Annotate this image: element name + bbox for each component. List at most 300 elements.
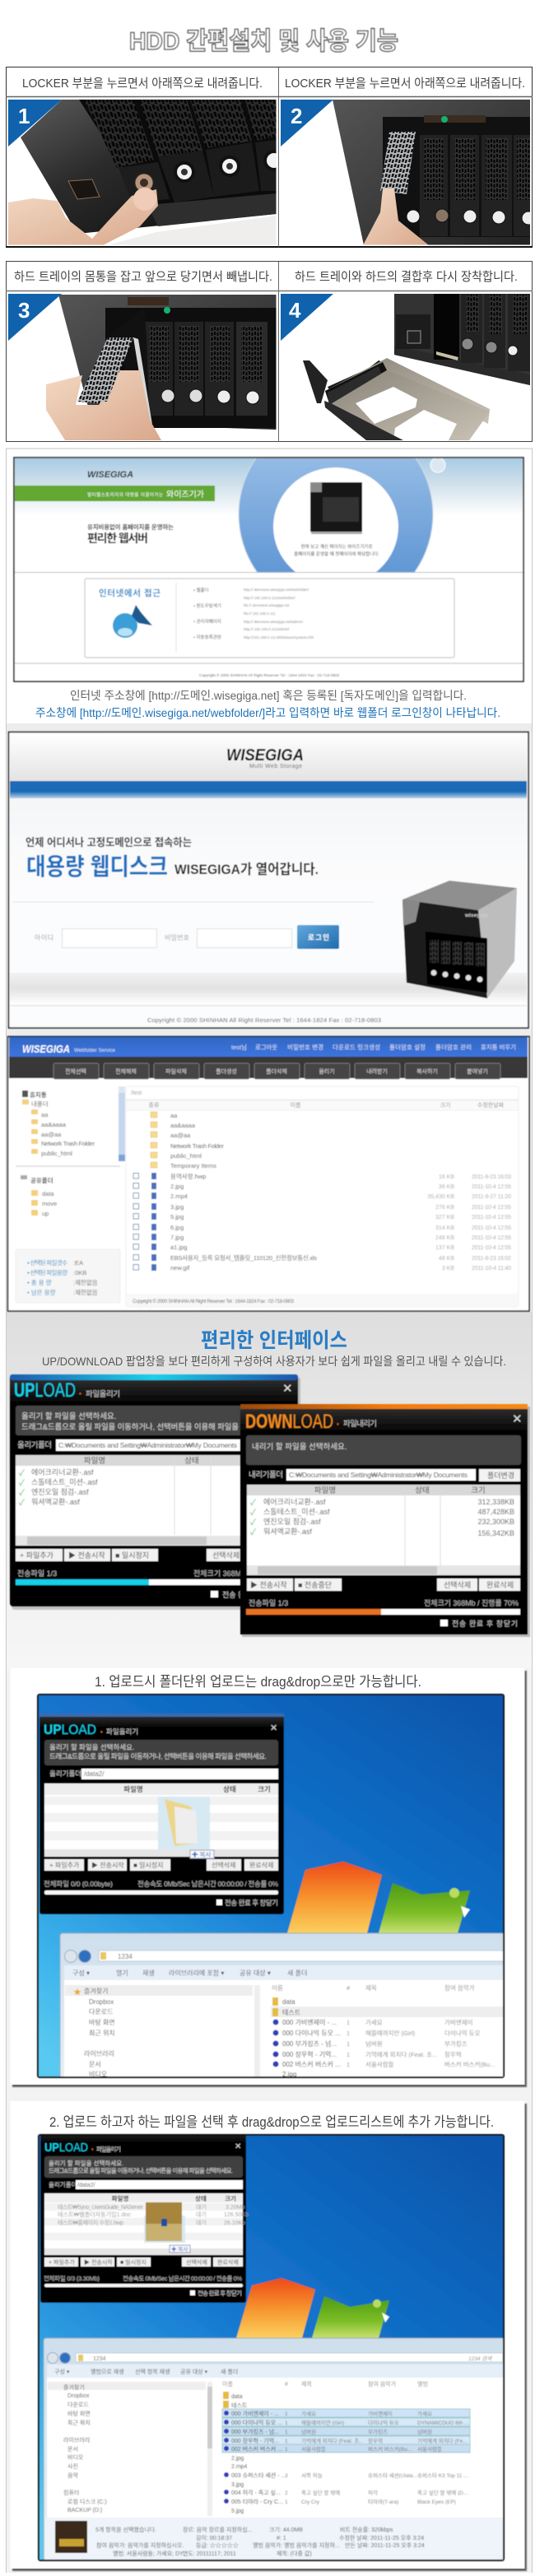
upload window: 올리기폴더	[49, 1769, 81, 1778]
explorer window: BACKUP (D:)	[67, 2508, 102, 2513]
explorer window: 장우혁	[368, 2437, 383, 2444]
explorer window: 앨범	[417, 2380, 428, 2388]
explorer window: 라이브러리에 포함 ▾	[169, 1969, 224, 1977]
download folder field: 폴더변경	[487, 1471, 514, 1480]
download file table: 487,428KB	[477, 1508, 514, 1516]
subheading: UP/DOWNLOAD 팝업창을 보다 편리하게 구성하여 사용자가 보다 쉽게 파일을 올리고 내릴 수 있습니다.	[42, 1355, 506, 1368]
device caption: 홈페이지를 운영할 때 첫페이지에 해당합니다.	[294, 551, 379, 557]
upload window: 대기	[196, 2219, 207, 2226]
access panel: • 웹폴더	[193, 587, 209, 593]
explorer window: 문서	[67, 2445, 78, 2453]
access panel: file:// demotest.wisegiga.net	[244, 603, 290, 607]
upload window: 완료삭제	[249, 1861, 273, 1869]
download title: ✕	[512, 1412, 523, 1426]
explorer window: 새 폴더	[287, 1969, 307, 1977]
explorer window: 이름	[272, 1983, 283, 1992]
upload window: 전체파일 0/3 (3.30Mb)	[44, 2274, 100, 2282]
upload window: 전송 완료 후 창닫기	[225, 1899, 278, 1907]
device: WISEGIGA NAS: wisegiga	[464, 913, 488, 918]
folder tree: 내폴더	[31, 1100, 49, 1108]
folder tree	[16, 1086, 125, 1217]
explorer window: 서울사람들	[301, 2445, 326, 2453]
explorer window: 000 다이나믹 듀오 ...	[231, 2419, 282, 2426]
green banner text	[87, 490, 204, 500]
upload file table: ✓	[19, 1479, 25, 1488]
upload folder field	[17, 1439, 242, 1451]
folder tree: move	[42, 1200, 57, 1207]
explorer window: 허각	[368, 2489, 378, 2496]
explorer window: 비디오	[89, 2071, 107, 2078]
folder tree: aa	[41, 1111, 49, 1118]
toolbar tabs: 폴더삭제	[266, 1067, 287, 1075]
upload file table: 워셔액교환-.asf	[31, 1497, 80, 1506]
download file table: 엔진오일 점검-.asf	[263, 1517, 321, 1526]
explorer window: 제목	[365, 1984, 377, 1992]
toolbar tabs: 폴더생성	[216, 1067, 237, 1075]
address instruction text: 인터넷 주소창에 [http://도메인.wisegiga.net] 혹은 등록된 [독자도메인]을 입력합니다.	[70, 689, 467, 702]
explorer window: ★	[73, 1988, 81, 1997]
upload title: UPLOAD	[14, 1379, 76, 1402]
logo: WISEGIGA	[87, 470, 133, 480]
explorer window: 2.jpg	[282, 2071, 296, 2078]
upload window: + 파일추가	[49, 2258, 75, 2266]
explorer window: data	[231, 2394, 243, 2400]
download file table: 워셔액교환-.asf	[263, 1527, 312, 1536]
details pane: 만든 날짜: 2011-11-25 오후 3:24	[345, 2541, 425, 2549]
details pane: 제목: (다중 값)	[277, 2550, 312, 2557]
upload window: 선택삭제	[212, 1861, 235, 1869]
upload buttons	[16, 1549, 242, 1561]
folder tree: data	[42, 1190, 54, 1197]
upload window: UPLOAD	[44, 2141, 88, 2155]
download file table: ✓	[250, 1518, 256, 1527]
folder tree: aa@aa	[41, 1131, 62, 1138]
upload buttons: + 파일추가	[20, 1551, 54, 1560]
file list table: 3.jpg	[170, 1203, 184, 1211]
upload window: ■ 일시정지	[120, 2258, 147, 2266]
green banner text: 와이즈기가	[166, 490, 204, 500]
intro line: 언제 어디서나 고정도메인으로 접속하는	[26, 836, 192, 849]
download message	[246, 1435, 521, 1465]
explorer window: 참여 음악가	[444, 1983, 475, 1992]
explorer window: #	[347, 1984, 351, 1992]
upload window: 올리기 할 파일을 선택하세요.	[49, 1743, 134, 1751]
download buttons	[247, 1579, 520, 1591]
details pane: 비트 전송률: 320kbps	[340, 2526, 393, 2533]
upload file table: ✓	[19, 1469, 25, 1478]
file list table: 2.jpg	[170, 1183, 184, 1190]
explorer window: 슈퍼스타 K3 Top 11 ...	[417, 2471, 468, 2479]
explorer window: 002 버스커 버스커 ...	[282, 2060, 341, 2068]
file list table: 16 KB	[439, 1174, 454, 1180]
upload title	[14, 1379, 293, 1402]
access panel: http:// 192.168.0.111/webfolder/	[244, 596, 295, 600]
explorer window: 000 가비엔제이 - ...	[282, 2018, 337, 2026]
explorer window: 1	[347, 2019, 350, 2026]
panel: install steps 1 and 2	[6, 67, 535, 247]
explorer window: 선택 항목 재생	[135, 2368, 170, 2375]
folder tree: up	[42, 1210, 49, 1217]
headline: WISEGIGA가 열어갑니다.	[174, 862, 319, 877]
explorer window: 가비엔제이	[368, 2410, 393, 2417]
access panel: file:// 192.168.0.111	[244, 611, 276, 616]
upload window: /data2/	[84, 1770, 105, 1778]
access panel: http:// demotest.wisegiga.net/admin/	[244, 620, 304, 624]
storage info box: :제한없음	[73, 1289, 98, 1296]
file list table: aa	[170, 1112, 178, 1119]
upload window: ■ 일시정지	[133, 1861, 163, 1869]
download title: 파일내리기	[343, 1420, 377, 1429]
upload window: 테스트₩홈페이지 수정1.hwp	[58, 2219, 123, 2226]
step number 4: 4	[289, 298, 301, 323]
download folder field: C:₩Documents and Setting₩Administrator₩My Documents	[289, 1471, 468, 1479]
file list table: 137 KB	[435, 1245, 454, 1251]
explorer window: 가세요	[365, 2019, 383, 2026]
explorer window: 서울사람들	[365, 2061, 394, 2068]
explorer window: 넘버원	[365, 2039, 383, 2048]
file list table: public_html	[170, 1152, 202, 1160]
folder tree: Network Trash Folder	[41, 1140, 95, 1147]
upload window: ▶ 전송시작	[84, 2258, 113, 2266]
top header bar: test님	[231, 1044, 247, 1051]
logo: WISEGIGA	[226, 746, 304, 765]
explorer window: 최근 위치	[89, 2029, 115, 2037]
download progress: 전체크기 368Mb / 진행률 70%	[424, 1598, 519, 1607]
explorer window: 기억에게 외치다 (Feat. 조...	[301, 2437, 364, 2444]
upload window: 드래그&드롭으로 올릴 파일을 이동하거나, 선택버튼을 이용해 파일을 선택하세요.	[49, 2166, 233, 2174]
top header bar: WISEGIGA	[22, 1043, 70, 1055]
photo: step 4 tray and device	[281, 293, 530, 440]
headline	[87, 523, 174, 545]
download buttons: ■ 전송중단	[298, 1581, 332, 1589]
file list table: new.gif	[170, 1264, 190, 1272]
explorer window: 즐겨찾기	[84, 1987, 108, 1995]
access panel: • 자동동록관량	[193, 634, 221, 640]
file list table: 6.jpg	[170, 1224, 184, 1231]
toolbar tabs: 파일삭제	[165, 1067, 187, 1075]
download progress: 전송파일 1/3	[249, 1599, 288, 1607]
file list table: 248 KB	[435, 1235, 454, 1241]
device: WISEGIGA NAS	[402, 881, 517, 998]
access panel	[85, 579, 454, 658]
upload title: 파일올리기	[86, 1390, 120, 1399]
explorer window: 장우혁	[444, 2050, 462, 2058]
upload progress	[16, 1569, 252, 1599]
explorer window: 1	[347, 2061, 350, 2068]
access panel: • 관리자페이지	[193, 618, 221, 625]
details pane: 참여 음악가: 음악가를 지정하십시오.	[96, 2541, 184, 2549]
download title	[245, 1411, 523, 1433]
upload window: 전송 완료 후 창닫기	[198, 2289, 242, 2297]
explorer window: 즐겨찾기	[63, 2383, 85, 2391]
access panel: 인터넷에서 접근	[99, 588, 160, 598]
step 4 caption: 하드 트레이와 하드의 결합후 다시 장착합니다.	[295, 270, 518, 284]
explorer window: 바탕 화면	[89, 2018, 115, 2026]
upload window: 테스트₩웹폴더자동기입1.doc	[58, 2211, 132, 2218]
upload file table: 스톨테스트_미션-.asf	[31, 1478, 98, 1486]
file list table: 327 KB	[435, 1215, 454, 1221]
title: HDD 간편설치 및 사용 기능	[129, 28, 398, 55]
file list table: 2011-9-23 16:02	[472, 1256, 511, 1262]
access panel: http://192.168.0.111:8000/auto/sysauto.bfd	[244, 635, 314, 639]
details pane: 크기: 44.0MB	[269, 2526, 303, 2533]
download progress	[246, 1598, 520, 1628]
storage info box: :0KB	[73, 1269, 86, 1276]
upload file table: ✓	[19, 1489, 25, 1498]
explorer window: 다이나믹 듀오	[368, 2419, 399, 2426]
explorer window: 2	[285, 2490, 288, 2496]
upload window: ✚ 복사	[192, 1851, 211, 1858]
download file table: 상태	[415, 1486, 430, 1495]
explorer window: #	[285, 2382, 288, 2388]
explorer window: 죽고 싶단 말 밖에	[301, 2489, 340, 2496]
screenshot: webfolder file manager	[8, 1037, 529, 1311]
step number 3: 3	[18, 298, 30, 323]
upload window: 파일명	[123, 1785, 143, 1793]
explorer window: 1	[285, 2420, 288, 2426]
storage info box: • 선택된 파일용량	[27, 1268, 67, 1276]
explorer window: 000 다이나믹 듀오 ...	[282, 2029, 341, 2037]
explorer window: 열기	[116, 1969, 128, 1977]
file list table: 2011-10-4 12:55	[472, 1205, 511, 1211]
headline: 대용량 웹디스크	[26, 853, 168, 881]
access panel: http:// demotest.wisegiga.net/webfolder/	[244, 588, 309, 592]
panel 1 caption: 1. 업로드시 폴더단위 업로드는 drag&drop으로만 가능합니다.	[95, 1674, 421, 1690]
download file table: ✓	[250, 1499, 256, 1508]
explorer window: 넘버원	[417, 2428, 432, 2435]
file list table: /test	[131, 1090, 142, 1096]
upload window: 26.10Kb	[224, 2220, 245, 2226]
explorer window: 죽고 싶단 말 밖에 (D...	[417, 2489, 468, 2496]
explorer window: 004 허각 - 죽고 싶...	[231, 2489, 281, 2496]
upload window: 126.50Kb	[224, 2212, 249, 2218]
explorer window: 버스커 버스커(Bu...	[368, 2445, 412, 2453]
upload progress: 전체크기 368Mb	[193, 1569, 245, 1578]
download file table: 크기	[471, 1486, 486, 1495]
access panel: http:// 192.168.0.111/admin/	[244, 627, 290, 631]
upload window: 완료삭제	[217, 2258, 239, 2266]
explorer window: 기억에게 외치다 (Fe...	[417, 2437, 468, 2444]
upload file table: ✓	[19, 1499, 25, 1508]
explorer window: 버스커 버스커(Bu...	[444, 2060, 495, 2068]
details pane: 앨범 음악가: 앨범 음악가를 지정하...	[253, 2541, 340, 2549]
screenshot: login page	[8, 732, 528, 1028]
upload window: 올리기폴더	[49, 2181, 77, 2188]
upload file table: 엔진오일 점검-.asf	[31, 1487, 89, 1496]
window: download popup	[240, 1404, 530, 1637]
top header bar: 로그아웃	[255, 1043, 277, 1051]
file list table: 2011-10-4 12:55	[472, 1184, 511, 1190]
toolbar tabs: 전체선택	[65, 1067, 86, 1075]
explorer window: 새 폴더	[221, 2368, 238, 2375]
explorer window: 공유 대상 ▾	[240, 1969, 271, 1977]
explorer window: 구성 ▾	[72, 1969, 90, 1977]
upload window: 선택삭제	[186, 2258, 207, 2266]
download title: •	[337, 1421, 339, 1428]
file list table: 35,430 KB	[427, 1194, 454, 1200]
windows logo	[287, 1862, 470, 1933]
upload message	[16, 1406, 250, 1435]
file list table: 2011-10-4 12:55	[472, 1245, 511, 1251]
explorer window: 가세요	[417, 2410, 432, 2417]
explorer window: 000 가비엔제이 - ...	[231, 2410, 279, 2417]
file list table: 2011-10-4 11:40	[472, 1266, 511, 1272]
upload message: 올리기 할 파일을 선택하세요.	[21, 1411, 116, 1421]
photo: step 2 tray handle released	[281, 100, 535, 245]
upload progress: 전송 완료	[222, 1591, 252, 1599]
login form: 아이디	[35, 933, 54, 942]
details pane: #: 1	[277, 2536, 286, 2541]
download file table: ✓	[250, 1528, 256, 1537]
upload window: 테스트₩Syno_UsersGuide_NAServer	[58, 2204, 144, 2211]
explorer window: 재생	[142, 1969, 155, 1977]
file list table: a1.jpg	[170, 1244, 187, 1251]
explorer window: 1	[285, 2430, 288, 2435]
file list table: 2011-10-4 12:55	[472, 1225, 511, 1231]
explorer window: 앨범으로 재생	[91, 2368, 124, 2375]
file list table: 48 KB	[439, 1256, 454, 1262]
download buttons: 완료삭제	[486, 1581, 514, 1589]
explorer window: 사진	[67, 2462, 78, 2470]
file list table: 크기	[440, 1101, 450, 1109]
explorer window: 이름	[222, 2380, 233, 2388]
folder tree: aa&aaaa	[41, 1121, 67, 1128]
login form	[35, 925, 339, 949]
download folder field: 내리기폴더	[249, 1471, 283, 1480]
upload window: •	[91, 2147, 94, 2153]
explorer window: Cry Cry	[301, 2499, 320, 2505]
explorer window: 기억에게 외치다 (Feat. 조...	[365, 2050, 437, 2058]
explorer window: 티아라(T-ara)	[368, 2498, 398, 2505]
step 3 caption: 하드 트레이의 몸통을 잡고 앞으로 당기면서 빼냅니다.	[14, 270, 272, 284]
upload folder field: C:₩Documents and Setting₩Administrator₩My Documents	[58, 1441, 237, 1449]
download file table	[247, 1485, 520, 1575]
screenshot: WISEGIGA web server landing page	[12, 456, 525, 683]
step 1 caption: LOCKER 부분을 누르면서 아래쪽으로 내려줍니다.	[22, 77, 263, 91]
upload window: 파일올리기	[106, 1727, 138, 1736]
download progress: 전송 완료 후 창닫기	[452, 1619, 518, 1628]
explorer window: 1	[285, 2411, 288, 2417]
toolbar tabs: 올리기	[319, 1067, 335, 1075]
explorer window: 000 부가킹즈 - 넘...	[231, 2428, 279, 2435]
storage info box: :EA	[73, 1259, 83, 1267]
address instruction text: 주소창에 [http://도메인.wisegiga.net/webfolder/]라고 입력하면 바로 웹폴더 로그인창이 나타납니다.	[35, 706, 500, 719]
explorer window: 제목	[301, 2381, 312, 2388]
explorer window: 003 슈퍼스타 세션 - ...	[231, 2471, 286, 2479]
explorer window: 1	[347, 2040, 350, 2048]
explorer window: 라이브러리	[84, 2049, 114, 2058]
upload window: 파일올리기	[96, 2146, 121, 2153]
explorer window: data	[282, 1998, 295, 2006]
download title: DOWNLOAD	[245, 1411, 333, 1433]
upload window: 파일명	[112, 2194, 128, 2202]
step number 1: 1	[18, 104, 30, 128]
login form: 로그인	[308, 933, 329, 942]
explorer window: 2.mp4	[231, 2464, 248, 2470]
upload window: 전체파일 0/0 (0.00byte)	[44, 1880, 113, 1888]
upload window: •	[100, 1728, 103, 1736]
explorer window: 002 버스커 버스커 ...	[231, 2445, 282, 2453]
panel: folder drag and drop upload	[10, 1668, 527, 2087]
file list table	[126, 1086, 519, 1307]
explorer window: 서울사람들	[417, 2445, 442, 2453]
details pane: 5개 항목을 선택했습니다.	[95, 2526, 156, 2533]
panel: file drag and drop upload	[10, 2101, 527, 2571]
explorer window: 바탕 화면	[67, 2410, 91, 2417]
explorer window: 라이브러리	[63, 2436, 90, 2443]
explorer window	[60, 1933, 505, 2078]
upload folder field: 올리기폴더	[17, 1441, 52, 1450]
device image	[310, 482, 362, 534]
download file table: 에어크리너교환-.asf	[263, 1497, 326, 1506]
upload window: 크기	[225, 2194, 236, 2202]
file list table: 2011-9-27 11:20	[472, 1194, 511, 1200]
download buttons: ▶ 전송시작	[250, 1581, 287, 1589]
folder tree: 휴지통	[30, 1090, 47, 1099]
explorer window: 1234 검색	[468, 2355, 492, 2362]
screenshot: desktop with upload window and explorer selection	[38, 2132, 505, 2561]
file list table: 3 KB	[442, 1266, 454, 1272]
explorer window: 000 부가킹즈 - 넘...	[282, 2039, 337, 2048]
toolbar tabs	[9, 1057, 528, 1079]
headline: 편리한 웹서버	[87, 532, 148, 545]
headline: 유지비용없이 홈페이지를 운영하는	[87, 523, 174, 531]
explorer window: 문서	[89, 2061, 101, 2068]
explorer window: 넘버원	[301, 2428, 316, 2435]
explorer window: 서쪽 하늘	[301, 2471, 323, 2479]
upload window: 3.20Mb	[226, 2205, 244, 2211]
photo: step 3 pulling tray out	[8, 294, 277, 440]
explorer window	[44, 2338, 505, 2560]
upload file table: 상태	[184, 1457, 199, 1466]
explorer window: 참여 음악가	[368, 2380, 397, 2388]
explorer window: 1	[347, 2051, 350, 2058]
file list table: 이름	[291, 1101, 301, 1109]
file list table: 314 KB	[435, 1225, 454, 1231]
download buttons: 선택삭제	[444, 1581, 471, 1589]
download message: 내리기 할 파일을 선택하세요.	[252, 1442, 347, 1452]
footer text: Copyright © 2000 SHINHAN All Right Reserver Tel : 1644-1824 Fax : 02-718-0803	[199, 672, 339, 677]
explorer window: 테스트	[282, 2009, 300, 2016]
explorer window: 1	[285, 2439, 288, 2444]
upload file table: 파일명	[84, 1457, 105, 1466]
footer text: Copyright © 2000 SHINHAN All Right Reserver Tel : 1644-1824 Fax : 02-718-0803	[147, 1016, 381, 1024]
access panel: • 윈도우탐색기	[193, 602, 221, 609]
file list table: 276 KB	[435, 1205, 454, 1211]
top header bar	[9, 1037, 528, 1057]
storage info box: :제한없음	[73, 1279, 98, 1286]
explorer window: 비디오	[67, 2453, 84, 2461]
top header bar: 다운로드 링크생성	[333, 1043, 380, 1051]
details pane: 연도: 20111117; 2011	[183, 2550, 236, 2557]
explorer window: 1234	[93, 2356, 106, 2362]
explorer window: 가비엔제이	[444, 2018, 472, 2026]
upload window: ✕	[235, 2142, 241, 2151]
login form: 비밀번호	[165, 934, 189, 942]
file list table: 7.jpg	[170, 1234, 184, 1241]
explorer window: 부가킹즈	[444, 2039, 468, 2048]
upload window: ✚ 복사	[171, 2245, 188, 2253]
device caption: 현재 보고 계신 페이지는 와이즈기가로	[300, 543, 373, 550]
screenshot: desktop with upload window and explorer	[37, 1694, 505, 2078]
explorer window: 1234	[118, 1953, 133, 1960]
explorer window: 로컬 디스크 (C:)	[67, 2498, 107, 2505]
upload window: 대기	[196, 2211, 207, 2218]
file list table: 종류	[149, 1102, 160, 1109]
upload window	[40, 2132, 249, 2303]
folder tree: public_html	[41, 1150, 72, 1157]
upload window: /data2/	[77, 2183, 95, 2188]
